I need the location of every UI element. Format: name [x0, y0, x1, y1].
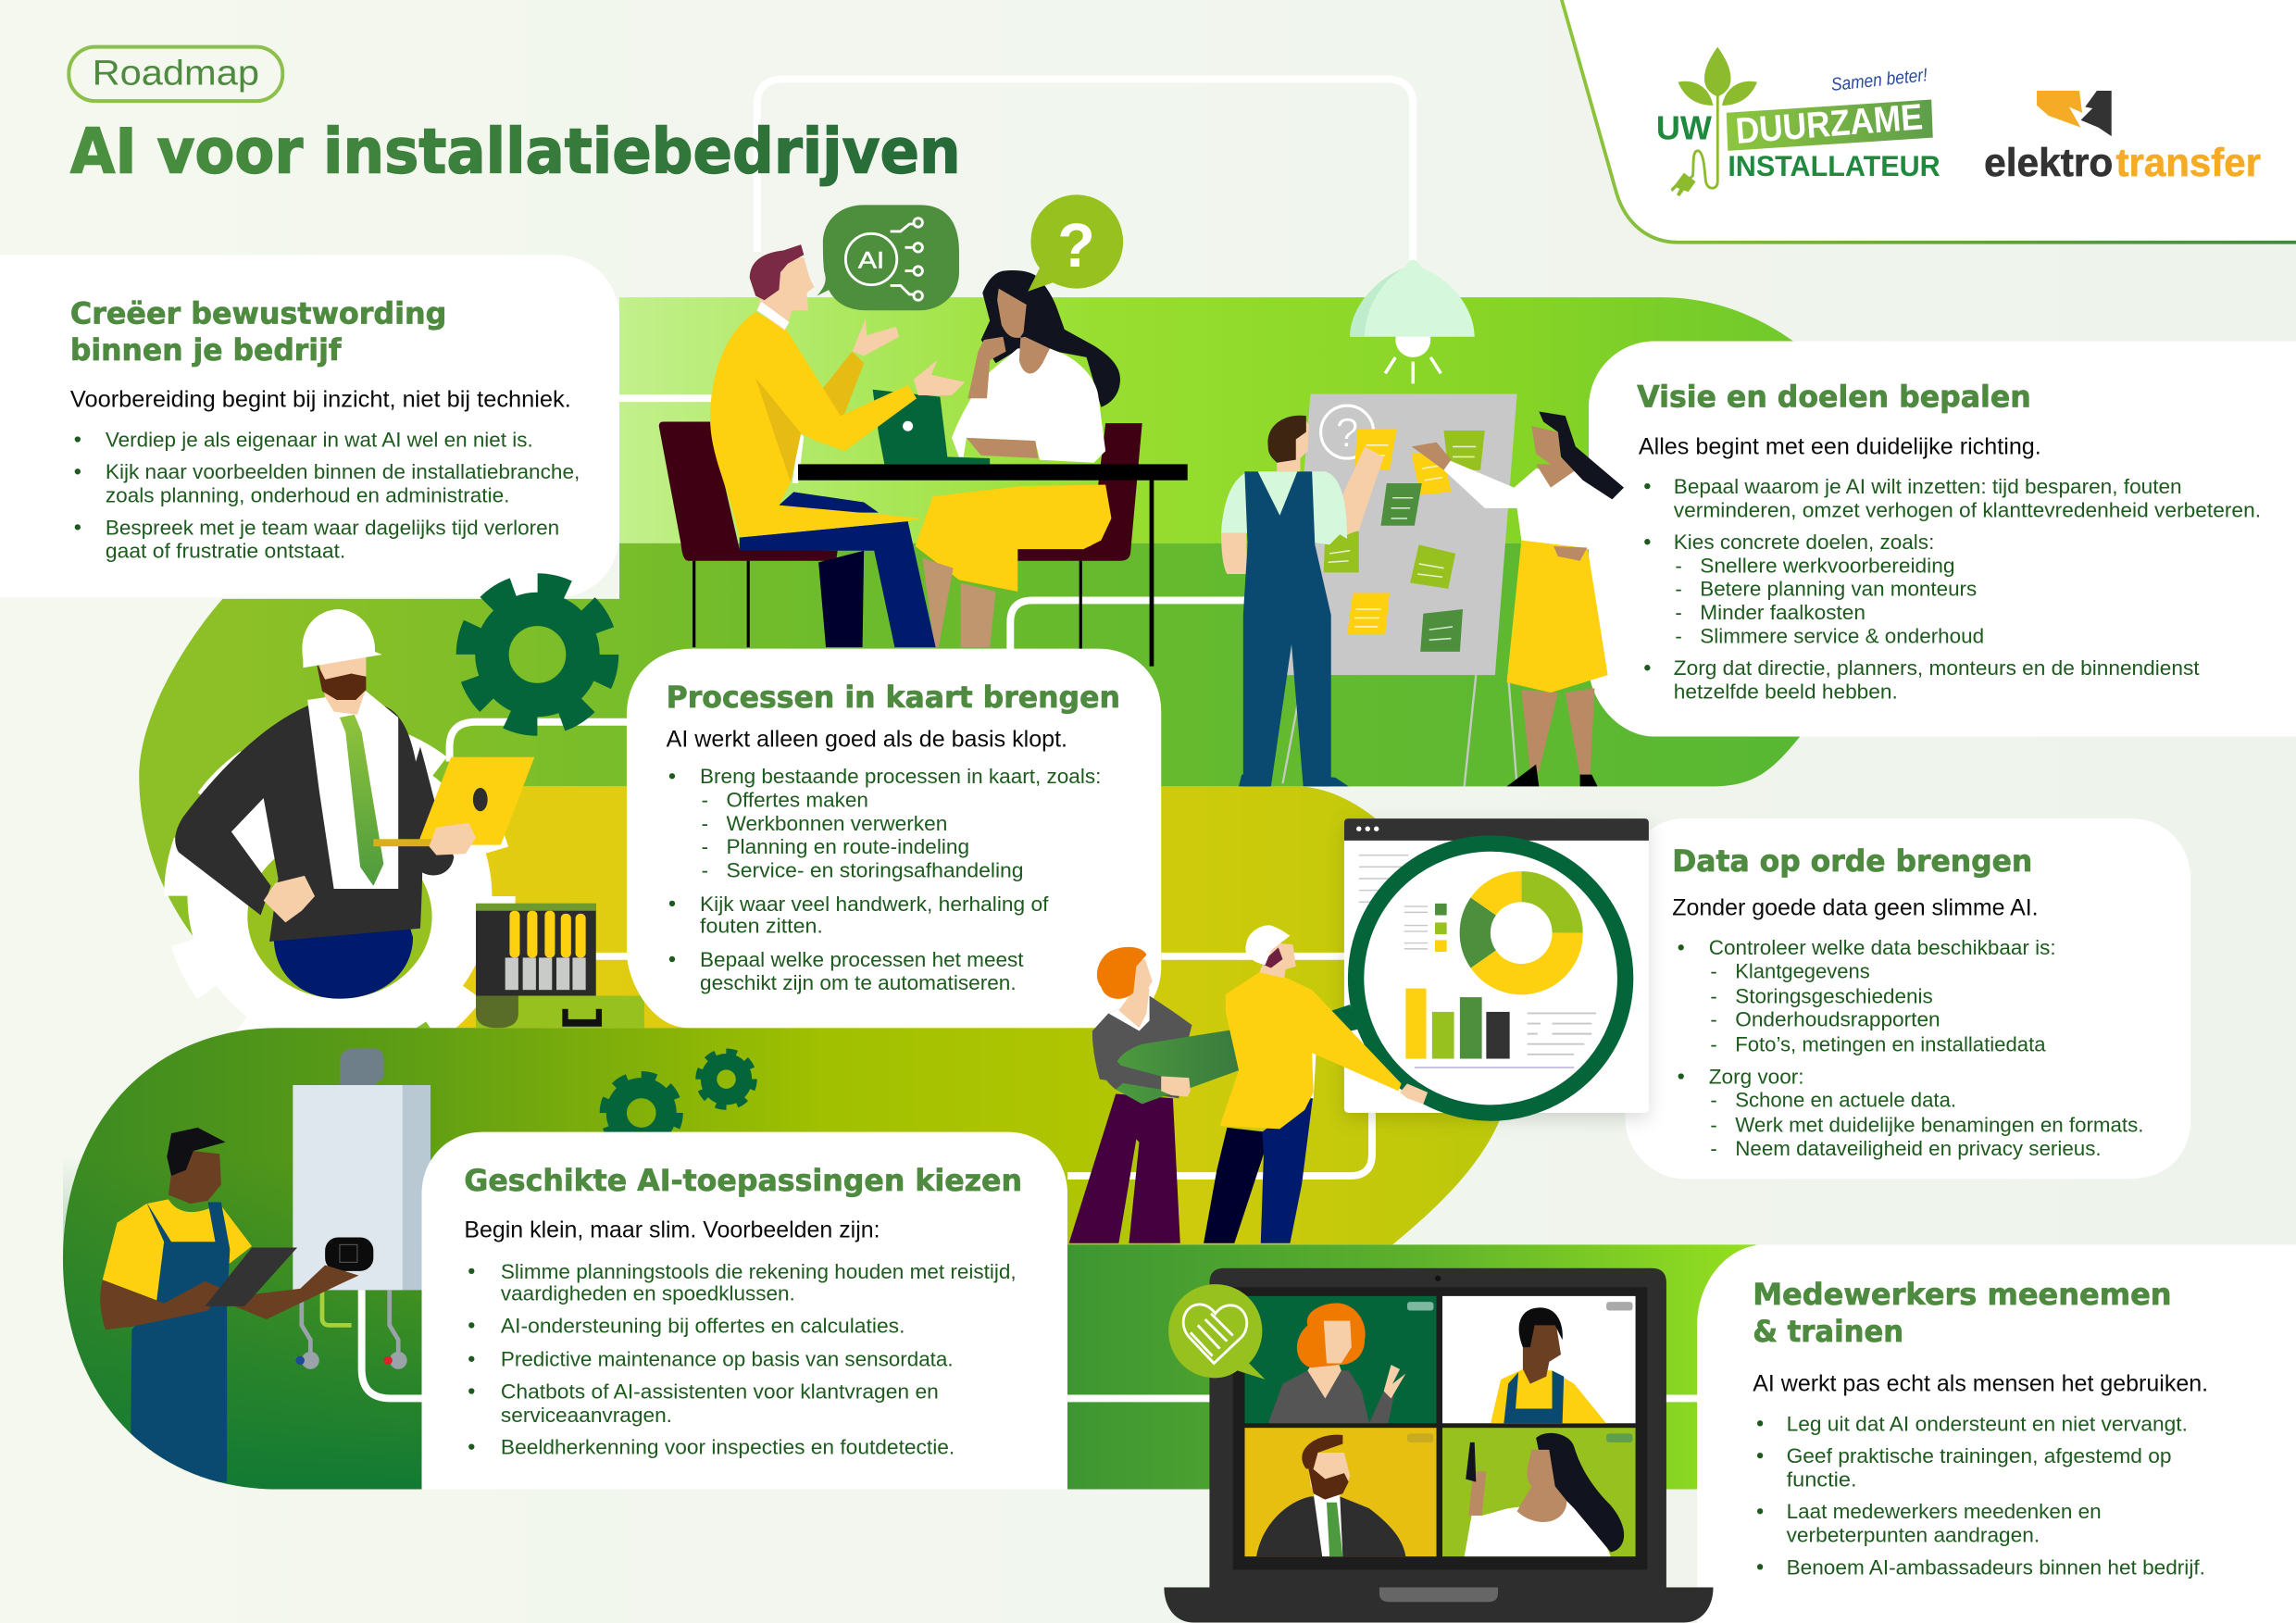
trousers	[274, 889, 413, 999]
chair left	[659, 422, 838, 561]
heading: Creëer bewustwording	[70, 298, 446, 331]
face	[1130, 959, 1153, 999]
bullets: functie.	[1787, 1467, 1857, 1491]
board	[1287, 393, 1517, 675]
bullets	[1757, 1412, 2205, 1579]
woman face, neck and arms	[967, 289, 1050, 458]
roadmap pill	[69, 47, 282, 101]
head	[1271, 417, 1309, 471]
helmet	[302, 609, 382, 668]
woman hair	[1539, 411, 1624, 499]
bullets: Leg uit dat AI ondersteunt en niet vervangt.	[1787, 1412, 2188, 1435]
woman hair	[981, 270, 1120, 407]
man hands and face	[757, 257, 965, 395]
right arm	[227, 1266, 359, 1319]
AI label: AI	[858, 247, 884, 273]
beard	[317, 662, 366, 700]
bullets: Snellere werkvoorbereiding	[1700, 554, 1954, 577]
panel: data	[1626, 818, 2190, 1179]
illustration: planning board	[1221, 393, 1624, 786]
logo: elektrotransfer	[1984, 91, 2261, 185]
bullets: Zorg dat directie, planners, monteurs en de binnendienst	[1674, 656, 2200, 680]
bullets: Bepaal waarom je AI wilt inzetten: tijd besparen, fouten	[1674, 475, 2182, 498]
bullets: -	[1710, 1137, 1717, 1160]
jacket	[1219, 972, 1402, 1129]
right sleeve	[407, 747, 454, 875]
band: row 2 yellow	[446, 786, 1501, 1244]
boiler flue	[340, 1048, 383, 1085]
question circle	[1321, 406, 1374, 458]
helmet	[1245, 925, 1290, 965]
question mark: ?	[1057, 212, 1095, 281]
text lines	[1528, 1013, 1596, 1055]
notch	[1379, 1587, 1498, 1602]
tie	[340, 715, 383, 886]
bullets	[669, 765, 1101, 994]
band: row 3	[63, 1028, 1171, 1490]
lid	[1209, 1268, 1666, 1589]
illustration: planning board: ?	[1336, 410, 1358, 456]
bullets: Service- en storingsafhandeling	[726, 858, 1024, 881]
intro: Alles begint met een duidelijke richting.	[1639, 434, 2041, 459]
shoes	[1239, 775, 1349, 786]
shirt collar	[757, 302, 790, 330]
bullets: -	[1710, 1033, 1717, 1056]
man hair	[750, 244, 804, 300]
shirt	[103, 1199, 252, 1300]
shirt strip	[792, 433, 804, 483]
heading: Processen in kaart brengen	[667, 681, 1120, 715]
bullets: Slimme planningstools die rekening houden met reistijd,	[501, 1260, 1017, 1283]
pipes and valves	[302, 1290, 398, 1359]
woman legs	[1521, 688, 1594, 776]
screwdrivers	[509, 911, 586, 957]
bullets: -	[1710, 1089, 1717, 1112]
bullets	[468, 1260, 1017, 1459]
trousers	[1069, 1093, 1180, 1243]
hair	[1261, 947, 1283, 968]
hand	[1161, 1076, 1191, 1097]
bullets: Beeldherkenning voor inspecties en foutdetectie.	[501, 1436, 955, 1459]
plug	[1671, 173, 1696, 196]
bullets: verminderen, omzet verhogen of klanttevredenheid verbeteren.	[1674, 498, 2261, 521]
plant leaves	[1678, 47, 1757, 106]
board legs	[1283, 675, 1517, 786]
lower sleeve	[1092, 1030, 1161, 1090]
donut chart	[1475, 887, 1567, 980]
man far leg	[818, 551, 864, 647]
bullets: Schone en actuele data.	[1735, 1089, 1956, 1112]
bullets: -	[702, 858, 708, 881]
note lines	[1329, 445, 1476, 640]
band: row 1 upper	[619, 297, 1816, 543]
tablet	[205, 1248, 297, 1306]
laptop	[873, 390, 990, 464]
intro: AI werkt pas echt als mensen het gebruiken.	[1753, 1372, 2208, 1397]
bullets: Bespreek met je team waar dagelijks tijd verloren	[106, 516, 559, 539]
bullets: -	[702, 835, 708, 858]
band	[1727, 100, 1933, 151]
bullets: Neem dataveiligheid en privacy serieus.	[1735, 1137, 2102, 1160]
bullets	[1644, 475, 2261, 703]
panel: visie	[1589, 342, 2296, 737]
illustration: lamp	[1350, 260, 1475, 383]
base	[1164, 1587, 1714, 1622]
man trousers	[740, 521, 936, 647]
woman blouse	[952, 348, 1105, 463]
bullets: Offertes maken	[726, 788, 868, 811]
bullets: -	[1675, 578, 1682, 601]
intro: Zonder goede data geen slimme AI.	[1672, 896, 2039, 921]
bullets	[1678, 936, 2144, 1160]
man jacket and near arm	[710, 312, 922, 537]
band: row 3 dark overlay	[63, 1156, 422, 1490]
icon: small gears	[605, 1053, 753, 1150]
laptop	[418, 757, 534, 845]
bullets: hetzelfde beeld hebben.	[1674, 680, 1898, 703]
toolbox base	[476, 996, 644, 1028]
woman neck, face and hands	[1412, 426, 1587, 561]
bullets: Storingsgeschiedenis	[1735, 984, 1933, 1007]
icon	[2037, 91, 2082, 128]
bullets: Kijk waar veel handwerk, herhaling of	[700, 893, 1049, 916]
bullets: Klantgegevens	[1735, 960, 1870, 983]
bullets: serviceaanvragen.	[501, 1404, 672, 1427]
mute buttons	[1407, 1302, 1633, 1442]
blouse	[1092, 996, 1192, 1098]
sticky notes	[1324, 429, 1485, 652]
tile: woman with phone	[1442, 1428, 1636, 1556]
heading: Medewerkers meenemen	[1753, 1279, 2172, 1312]
navy strip at waist	[779, 492, 879, 513]
bullets: -	[1710, 1008, 1717, 1031]
DUURZAME: DUURZAME	[1734, 96, 1924, 152]
UW: UW	[1656, 108, 1713, 146]
handle	[1116, 1030, 1239, 1105]
screen	[1233, 1287, 1647, 1570]
woman skirt	[916, 485, 1111, 592]
illustration: woman with magnifier handle	[1069, 947, 1239, 1243]
magnifier with charts	[1356, 843, 1626, 1113]
bullets: Breng bestaande processen in kaart, zoals:	[700, 765, 1101, 788]
bullets: Verdiep je als eigenaar in wat AI wel en niet is.	[106, 428, 533, 451]
light rays	[1385, 357, 1441, 383]
overalls	[131, 1203, 230, 1482]
bullets: Geef praktische trainingen, afgestemd op	[1787, 1444, 2172, 1467]
jacket shadow	[755, 378, 801, 481]
chair legs	[694, 561, 1080, 667]
dark green gear	[468, 584, 607, 725]
collar and neck	[1108, 996, 1150, 1030]
bullets: Werkbonnen verwerken	[726, 812, 947, 835]
wordmark: elektro	[1984, 141, 2113, 185]
hair	[1097, 947, 1146, 999]
circuit lines	[891, 218, 922, 300]
face	[1259, 943, 1296, 979]
panel: medewerkers	[1697, 1244, 2296, 1623]
heading line 2: binnen je bedrijf	[70, 334, 343, 368]
hand	[1400, 1083, 1428, 1105]
boiler control	[325, 1237, 373, 1271]
bullets: Predictive maintenance op basis van sensordata.	[501, 1348, 954, 1371]
bullets: Zorg voor:	[1709, 1065, 1804, 1088]
bullets: Controleer welke data beschikbaar is:	[1709, 936, 2056, 959]
overalls	[1243, 471, 1331, 786]
speech bubble: AI	[817, 205, 959, 310]
webcam	[1435, 1276, 1441, 1281]
bullets: Onderhoudsrapporten	[1735, 1008, 1940, 1031]
bullets: Planning en route-indeling	[726, 835, 969, 858]
man shirt	[1221, 471, 1347, 544]
bar chart	[1405, 989, 1510, 1059]
bullets: Minder faalkosten	[1700, 601, 1866, 624]
logo: Uw Duurzame Installateur	[1656, 47, 1940, 196]
tile: woman with glasses	[1244, 1296, 1437, 1423]
bullets: Werk met duidelijke benamingen en formats.	[1735, 1114, 2144, 1137]
hair	[167, 1128, 226, 1176]
bullets: -	[1710, 1114, 1717, 1137]
illustration: engineer with laptop	[175, 609, 534, 999]
connector lines lower	[362, 1113, 1702, 1398]
intro: Begin klein, maar slim. Voorbeelden zijn:	[464, 1217, 880, 1242]
baseline	[1415, 1067, 1574, 1068]
illustration: man holding magnifier	[1204, 925, 1428, 1243]
boiler	[293, 1085, 403, 1290]
tile: technician	[1442, 1296, 1636, 1423]
man far arm	[823, 352, 864, 439]
bullets: -	[1675, 601, 1682, 624]
hand under laptop	[429, 823, 476, 855]
left hand	[264, 876, 315, 922]
bullets: gaat of frustratie ontstaat.	[106, 540, 345, 563]
bullets: Kies concrete doelen, zoals:	[1674, 531, 1934, 554]
bullets: -	[702, 812, 708, 835]
panel: toepassingen	[422, 1132, 1067, 1490]
bullets: verbeterpunten aandragen.	[1787, 1523, 2040, 1546]
woman skirt	[1506, 541, 1608, 693]
bullets: Kijk naar voorbeelden binnen de installatiebranche,	[106, 460, 580, 483]
tile: bearded man	[1244, 1428, 1437, 1556]
illustration: two people talking at a table	[659, 244, 1188, 667]
bullets: -	[702, 788, 708, 811]
bullets: vaardigheden en spoedklussen.	[501, 1281, 795, 1305]
table	[798, 464, 1188, 667]
panel: processen	[627, 649, 1161, 1028]
INSTALLATEUR: INSTALLATEUR	[1728, 149, 1940, 182]
connector lines	[450, 79, 1413, 956]
magnifier handle	[1329, 1005, 1357, 1032]
shirt	[307, 692, 398, 889]
bullets: Slimmere service & onderhoud	[1700, 624, 1984, 647]
stem and cord	[1687, 82, 1717, 188]
jacket	[175, 705, 422, 942]
toolbox	[476, 904, 644, 1028]
woman legs	[922, 558, 996, 647]
band: row 4	[1067, 1244, 1755, 1490]
dashboard window	[1344, 818, 1649, 1113]
bullets: Betere planning van monteurs	[1700, 578, 1977, 601]
window dots	[1356, 827, 1379, 831]
bullets: Benoem AI-ambassadeurs binnen het bedrijf.	[1787, 1555, 2205, 1579]
bullets: -	[1710, 960, 1717, 983]
heading line 2: & trainen	[1753, 1316, 1903, 1349]
bullets: AI-ondersteuning bij offertes en calculaties.	[501, 1314, 905, 1337]
bullets: fouten zitten.	[700, 914, 823, 937]
band: row 1 and 2 green	[139, 543, 1816, 1028]
speech bubble: question	[1028, 194, 1123, 292]
bullets: zoals planning, onderhoud en administratie.	[106, 483, 509, 506]
laptop with video call	[1164, 1268, 1714, 1622]
woman blouse	[1443, 460, 1616, 558]
pill label: Roadmap	[93, 55, 259, 94]
handshake icon	[1183, 1305, 1247, 1363]
heels	[1506, 765, 1598, 786]
navy leg	[1261, 1092, 1314, 1243]
dark leg	[1204, 1128, 1266, 1243]
bullets	[75, 428, 580, 563]
intro: AI werkt alleen goed als de basis klopt.	[667, 728, 1067, 753]
title: AI voor installatiebedrijven	[70, 116, 961, 188]
left lines	[1359, 855, 1409, 902]
logo panel	[1561, 0, 2296, 243]
bullets: -	[1675, 554, 1682, 577]
intro: Voorbereiding begint bij inzicht, niet bij techniek.	[70, 388, 571, 413]
left arm	[100, 1280, 222, 1330]
bullets: Foto’s, metingen en installatiedata	[1735, 1033, 2046, 1056]
chair right	[1017, 423, 1142, 561]
legend	[1404, 904, 1447, 952]
shirt	[1300, 1047, 1316, 1098]
heading: Geschikte AI-toepassingen kiezen	[464, 1165, 1022, 1198]
bullets: -	[1675, 624, 1682, 647]
face	[168, 1151, 221, 1204]
bullets: geschikt zijn om te automatiseren.	[700, 971, 1017, 994]
white gear behind engineer	[181, 737, 499, 1055]
heading: Data op orde brengen	[1672, 845, 2032, 879]
bullets: Bepaal welke processen het meest	[700, 948, 1024, 971]
heading: Visie en doelen bepalen	[1637, 381, 2031, 415]
logo: elektrotransfer: transfer	[2115, 141, 2261, 185]
panel: bewustwording	[0, 255, 619, 597]
man skin	[1221, 446, 1384, 574]
tagline: Samen beter!	[1830, 65, 1928, 95]
bullets: Chatbots of AI-assistenten voor klantvragen en	[501, 1380, 939, 1403]
speech bubble: handshake	[1168, 1284, 1266, 1380]
illustration: technician at boiler	[100, 1048, 430, 1482]
bullets: Laat medewerkers meedenken en	[1787, 1500, 2102, 1523]
bullets: -	[1710, 984, 1717, 1007]
neck and face	[318, 653, 366, 715]
